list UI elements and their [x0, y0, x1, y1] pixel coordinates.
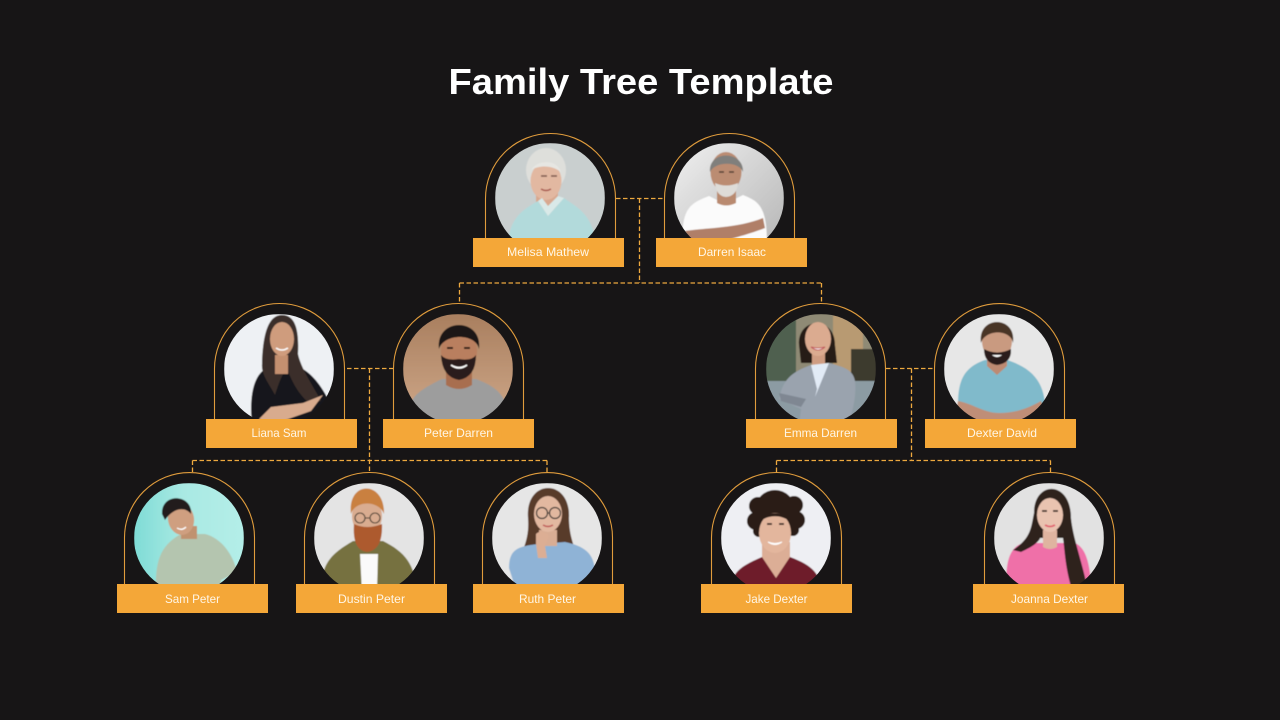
person: Sam Peter [117, 473, 268, 613]
arch frame [712, 472, 842, 584]
person: Dexter David [925, 304, 1076, 448]
name label [746, 419, 897, 448]
arch frame [214, 304, 344, 419]
name label [383, 419, 534, 448]
person: Peter Darren [383, 304, 534, 448]
name text: Dexter David [967, 426, 1037, 440]
portrait photo [994, 483, 1104, 593]
portrait photo [492, 483, 602, 593]
arch frame [304, 472, 434, 584]
name label [296, 584, 447, 613]
portrait photo [944, 314, 1054, 424]
name label [656, 238, 807, 267]
arch frame [482, 473, 612, 584]
connectors: dashed family lines [192, 198, 1050, 472]
arch frame [756, 304, 886, 419]
person: Emma Darren [746, 304, 897, 448]
name label [473, 238, 624, 267]
portrait photo [403, 314, 513, 424]
person: Dustin Peter [296, 472, 447, 613]
name label [701, 584, 852, 613]
name text: Liana Sam [252, 426, 306, 440]
name text: Melisa Mathew [507, 245, 589, 259]
person: Liana Sam [206, 304, 357, 448]
title: Family Tree Template [448, 61, 834, 102]
name text: Peter Darren [424, 426, 493, 440]
name text: Ruth Peter [519, 592, 576, 606]
name label [206, 419, 357, 448]
name label [973, 584, 1124, 613]
arch frame [664, 134, 794, 238]
person: Melisa Mathew [473, 134, 624, 267]
name label [473, 584, 624, 613]
portrait photo [495, 143, 605, 238]
name text: Sam Peter [165, 592, 220, 606]
person: Ruth Peter [473, 473, 624, 613]
portrait photo [314, 483, 424, 593]
arch frame [934, 304, 1064, 419]
portrait photo [721, 483, 831, 593]
name text: Darren Isaac [698, 245, 766, 259]
arch frame [984, 472, 1114, 584]
portrait photo [766, 314, 876, 424]
arch frame [486, 134, 616, 238]
name text: Dustin Peter [338, 592, 405, 606]
arch frame [394, 304, 524, 419]
portrait photo [134, 483, 244, 593]
person: Jake Dexter [701, 472, 852, 613]
name label [925, 419, 1076, 448]
name text: Joanna Dexter [1011, 592, 1088, 606]
portrait photo [674, 143, 784, 238]
family tree slide [117, 68, 1124, 613]
portrait photo [224, 314, 334, 424]
person: Darren Isaac [656, 134, 807, 267]
name label [117, 584, 268, 613]
arch frame [124, 473, 254, 584]
name text: Jake Dexter [746, 592, 808, 606]
person: Joanna Dexter [973, 472, 1124, 613]
name text: Emma Darren [784, 426, 857, 440]
